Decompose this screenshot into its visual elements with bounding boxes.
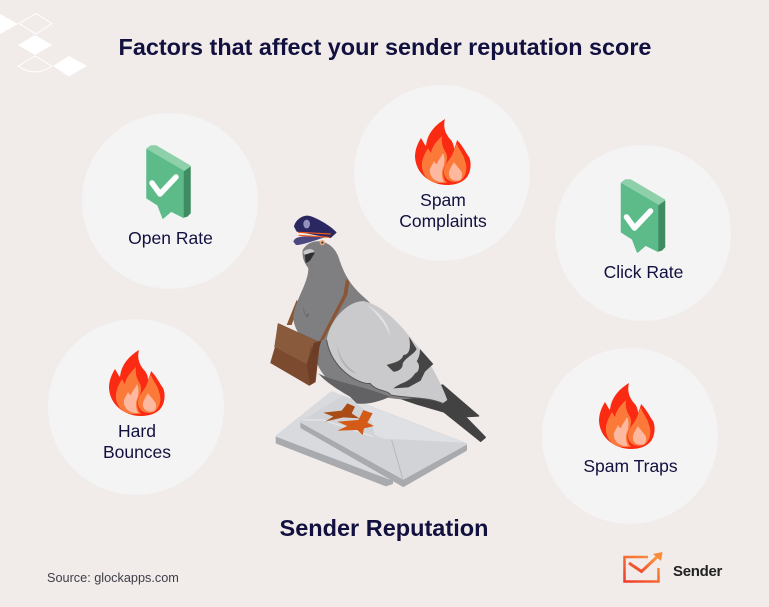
heading: sender reputation: Sender Reputation	[280, 515, 488, 541]
title: Factors that affect your sender reputation score	[119, 34, 651, 60]
icon: messenger bag	[271, 324, 322, 385]
panel: hard bounces: Bounces	[103, 442, 171, 462]
panel: click rate	[555, 145, 731, 321]
icon: pigeon chest shade	[303, 307, 309, 317]
icon: postal cap	[293, 216, 337, 245]
label: spam traps: Spam Traps	[583, 456, 678, 476]
label: hard bounces: Hard	[118, 421, 156, 441]
icon: open rate check badge	[147, 146, 190, 218]
logo: sender: Sender	[673, 563, 723, 580]
logo: sender	[624, 552, 723, 582]
icon: pigeon leg and foot right	[337, 410, 374, 435]
icon: click rate check badge	[622, 180, 664, 252]
panel: open rate	[82, 113, 258, 289]
icon: wing highlight	[367, 305, 391, 337]
icon: strap front	[320, 279, 349, 340]
label: open rate: Open Rate	[128, 228, 213, 248]
icon: beak and face	[303, 240, 325, 263]
icon: back envelope	[277, 392, 393, 485]
icon: front envelope	[301, 397, 466, 486]
illustration: pigeon on envelopes	[271, 216, 485, 486]
icon: hard bounces flame	[109, 350, 165, 416]
label: click rate: Click Rate	[604, 262, 683, 282]
icon: pigeon belly shade	[318, 373, 390, 404]
icon: pigeon tail	[393, 385, 485, 441]
panel: spam complaints	[354, 85, 530, 261]
icon: wing lower edge shadow	[327, 340, 443, 403]
icon: spam complaints flame	[415, 119, 471, 185]
icon: wing dark feathers upper	[387, 337, 417, 372]
icon: pigeon wing	[327, 301, 447, 403]
decorative diamond pattern	[0, 14, 87, 76]
panel: spam traps	[542, 348, 718, 524]
icon: pigeon leg and foot left	[323, 403, 359, 422]
icon: pigeon body	[293, 241, 420, 403]
label: spam complaints: Spam	[420, 190, 466, 210]
icon: pigeon rear strap	[287, 300, 299, 325]
panel: spam complaints: Complaints	[399, 211, 487, 231]
icon: spam traps flame	[599, 383, 655, 449]
source note: Source: glockapps.com	[47, 571, 179, 585]
panel: hard bounces	[48, 319, 224, 495]
icon: wing dark feathers lower	[393, 349, 433, 388]
